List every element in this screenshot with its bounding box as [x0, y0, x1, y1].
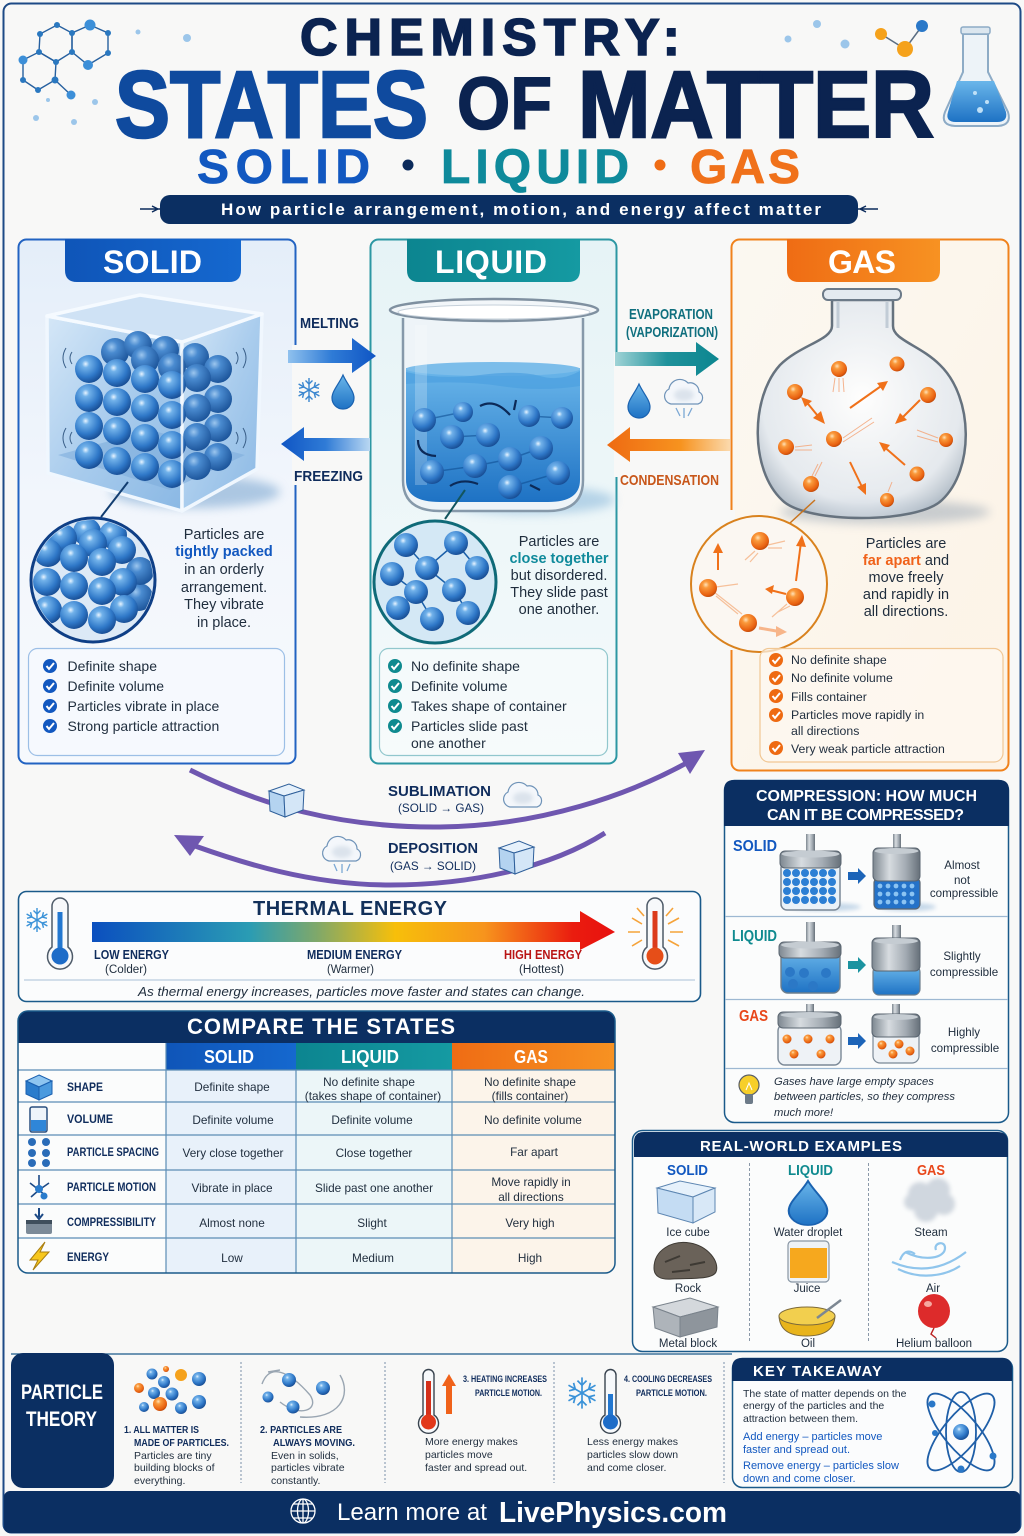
gas column values: No definite shape: [484, 1075, 576, 1089]
icon: round flask with gas particles: [758, 289, 990, 524]
gas compression row: compressible: [931, 1042, 999, 1055]
arrow: sublimation: (SOLID → GAS): [398, 801, 484, 815]
footer: Learn more at: [337, 1499, 487, 1526]
solid compression row: SOLID: [733, 838, 777, 855]
gas column values: Move rapidly in: [491, 1175, 571, 1189]
energy labels: (Hottest): [519, 964, 564, 976]
table title bar: COMPARE THE STATES: [187, 1014, 455, 1039]
point 3: 3. HEATING INCREASES: [463, 1374, 547, 1384]
particle theory label: [11, 1353, 114, 1488]
liquid property list: No definite shape: [411, 658, 520, 674]
point 1: Particles are tiny: [134, 1450, 212, 1462]
liquid compression row: [732, 922, 998, 995]
liquid property list: Takes shape of container: [411, 698, 567, 714]
point 2: Even in solids,: [271, 1450, 339, 1462]
gas column values: High: [518, 1251, 542, 1265]
panel: key takeaway: energy of the particles and the: [743, 1400, 884, 1412]
arrow: evaporation: [615, 306, 719, 376]
solid header: SOLID: [103, 244, 202, 280]
arrow: evaporation: (VAPORIZATION): [626, 324, 718, 341]
arrow: deposition: (GAS → SOLID): [390, 859, 476, 873]
icon: ice cube with particles: [47, 295, 280, 517]
point 3: [418, 1370, 547, 1474]
point 1: [124, 1366, 229, 1487]
liquid description: close together: [509, 551, 609, 567]
liquid examples: Juice: [794, 1283, 820, 1295]
column headers: [166, 1043, 615, 1070]
solid description: in an orderly: [184, 562, 265, 578]
row labels: [67, 1080, 159, 1264]
gas description: far apart and: [863, 553, 949, 569]
row icons: [26, 1075, 52, 1270]
panel: key takeaway: faster and spread out.: [743, 1444, 850, 1456]
footer: LivePhysics.com: [499, 1497, 727, 1529]
gas property list: all directions: [791, 724, 859, 738]
solid column values: Definite volume: [192, 1113, 274, 1127]
gas compression row: GAS: [739, 1008, 768, 1025]
compression header: [724, 780, 1009, 826]
panel: gas: [691, 239, 1008, 770]
arrow: freezing: FREEZING: [294, 468, 363, 485]
point 4: 4. COOLING DECREASES: [624, 1374, 712, 1384]
solid column values: Almost none: [199, 1216, 265, 1230]
panel: key takeaway: down and come closer.: [743, 1473, 856, 1485]
liquid header: LIQUID: [435, 244, 547, 280]
gas column values: Far apart: [510, 1145, 559, 1159]
liquid property list: [380, 648, 608, 756]
liquid property list: one another: [411, 735, 486, 751]
point 4: and come closer.: [587, 1462, 666, 1474]
column headers: SOLID: [204, 1047, 254, 1067]
gas description: Particles are: [866, 536, 946, 552]
row labels: ENERGY: [67, 1250, 109, 1264]
solid examples: Metal block: [659, 1338, 717, 1350]
particle theory label: PARTICLE: [21, 1381, 103, 1404]
panel: compression: [724, 780, 1009, 1122]
compression header: CAN IT BE COMPRESSED?: [767, 807, 964, 824]
point 3: More energy makes: [425, 1436, 518, 1448]
gas compression row: [739, 1004, 999, 1065]
solid property list: [28, 648, 284, 756]
title: of: OF: [457, 62, 552, 145]
gas property list: No definite shape: [791, 653, 887, 667]
liquid column values: (takes shape of container): [305, 1089, 441, 1103]
compression note: Gases have large empty spaces: [774, 1076, 934, 1088]
solid examples: [653, 1163, 718, 1350]
point 2: 2. PARTICLES ARE: [260, 1424, 342, 1436]
liquid column values: Medium: [352, 1251, 394, 1265]
icon: globe: [291, 1499, 315, 1523]
thermal heading: THERMAL ENERGY: [253, 898, 448, 920]
liquid column values: [305, 1075, 441, 1265]
gas zoom circle: [691, 516, 827, 652]
solid description: arrangement.: [181, 580, 267, 596]
gas examples: Air: [926, 1283, 940, 1295]
arrow: evaporation: EVAPORATION: [629, 306, 713, 323]
subtitle: solid liquid gas: [197, 141, 800, 194]
point 1: 1. ALL MATTER IS: [124, 1424, 199, 1436]
gas property list: Very weak particle attraction: [791, 742, 945, 756]
arrow: sublimation: [190, 750, 705, 827]
energy labels: MEDIUM ENERGY: [307, 948, 403, 962]
point 4: [566, 1370, 712, 1474]
energy labels: LOW ENERGY: [94, 948, 170, 962]
panel: solid: [18, 239, 299, 764]
arrow: deposition: [174, 833, 605, 885]
liquid compression row: LIQUID: [732, 928, 777, 945]
gas column values: No definite volume: [484, 1113, 582, 1127]
liquid property list: Particles slide past: [411, 718, 528, 734]
liquid examples: Oil: [801, 1338, 815, 1350]
liquid column values: Close together: [336, 1146, 412, 1160]
column headers: LIQUID: [341, 1047, 399, 1067]
point 3: particles move: [425, 1449, 493, 1461]
solid property list: Strong particle attraction: [68, 718, 219, 734]
icon: atom: [917, 1384, 1005, 1480]
row labels: PARTICLE MOTION: [67, 1180, 156, 1194]
energy labels: (Warmer): [327, 964, 374, 976]
arrow: freezing: [281, 427, 370, 485]
compression note: between particles, so they compress: [774, 1091, 955, 1103]
solid examples: Ice cube: [666, 1227, 710, 1239]
icon: snowflake and droplet (melting): [297, 375, 354, 409]
liquid description: They slide past: [510, 585, 608, 601]
solid property list: Definite shape: [68, 658, 157, 674]
solid header: [65, 239, 241, 282]
solid column values: [182, 1080, 284, 1265]
solid column values: Vibrate in place: [191, 1181, 273, 1195]
point 1: building blocks of: [134, 1462, 215, 1474]
solid column values: Low: [221, 1251, 243, 1265]
solid compression row: compressible: [930, 887, 998, 900]
point 4: PARTICLE MOTION.: [636, 1388, 707, 1398]
column tints: [166, 1070, 615, 1273]
panel: key takeaway: [732, 1358, 1012, 1488]
liquid column values: Slight: [357, 1216, 387, 1230]
panel: real-world examples: [632, 1130, 1008, 1352]
arrow: melting: MELTING: [300, 315, 359, 332]
liquid property list: Definite volume: [411, 678, 508, 694]
point 3: faster and spread out.: [425, 1462, 527, 1474]
solid property list: Definite volume: [68, 678, 164, 694]
solid description: Particles are: [184, 527, 264, 543]
particle theory label: THEORY: [26, 1408, 97, 1431]
liquid description: Particles are: [519, 534, 599, 550]
examples header: REAL-WORLD EXAMPLES: [700, 1138, 902, 1155]
liquid header: [407, 239, 580, 282]
arrow: deposition: DEPOSITION: [388, 840, 478, 857]
icon: droplet and cloud (evaporation): [628, 379, 703, 418]
gas description: and rapidly in: [863, 587, 949, 603]
liquid column values: Slide past one another: [315, 1181, 433, 1195]
liquid column values: Definite volume: [331, 1113, 413, 1127]
thermal caption: As thermal energy increases, particles move faster and states can change.: [137, 984, 585, 999]
gas examples: Helium balloon: [896, 1338, 972, 1350]
row labels: VOLUME: [67, 1112, 113, 1126]
solid examples: Rock: [675, 1283, 701, 1295]
gas column values: (fills container): [492, 1089, 568, 1103]
point 4: Less energy makes: [587, 1436, 678, 1448]
table: compare the states: [18, 1011, 615, 1273]
panel: key takeaway: attraction between them.: [743, 1413, 858, 1425]
energy labels: HIGH ENERGY: [504, 948, 583, 962]
title: matter: MATTER: [578, 52, 934, 158]
subtitle: solid liquid gas: SOLID: [197, 141, 370, 194]
subtitle: solid liquid gas: LIQUID: [441, 141, 629, 194]
energy labels: [94, 948, 583, 976]
arrow: condensation: [607, 427, 730, 489]
gas description: all directions.: [864, 604, 948, 620]
gas examples: [892, 1163, 972, 1350]
liquid compression row: Slightly: [943, 950, 981, 963]
solid zoom circle: [31, 518, 155, 642]
arrow: melting: [288, 315, 376, 373]
liquid examples: LIQUID: [788, 1163, 833, 1179]
solid column values: Very close together: [182, 1146, 284, 1160]
gas property list: [760, 648, 1003, 762]
subtitle pill: [140, 195, 878, 224]
solid description: in place.: [197, 615, 251, 631]
column headers: GAS: [514, 1047, 548, 1067]
panel: key takeaway: The state of matter depends on the: [743, 1388, 907, 1400]
gas property list: Fills container: [791, 690, 867, 704]
solid compression row: [733, 834, 998, 911]
title: states: STATES: [115, 52, 428, 158]
row labels: COMPRESSIBILITY: [67, 1215, 156, 1229]
liquid description: one another.: [519, 602, 599, 618]
point 2: [260, 1370, 355, 1487]
compression note: much more!: [774, 1107, 833, 1119]
point 3: PARTICLE MOTION.: [475, 1388, 542, 1398]
title: chemistry: CHEMISTRY:: [300, 9, 680, 67]
compression header: COMPRESSION: HOW MUCH: [756, 788, 977, 805]
point 4: particles slow down: [587, 1449, 678, 1461]
panel: key takeaway: KEY TAKEAWAY: [753, 1363, 882, 1380]
gas property list: No definite volume: [791, 671, 893, 685]
solid description: They vibrate: [184, 597, 264, 613]
row labels: SHAPE: [67, 1080, 103, 1094]
examples header: [634, 1132, 1008, 1157]
panel: thermal energy: [18, 892, 700, 1002]
liquid zoom circle: [374, 521, 496, 643]
arrow: sublimation: SUBLIMATION: [388, 783, 491, 800]
solid property list: Particles vibrate in place: [68, 698, 219, 714]
liquid examples: [774, 1163, 843, 1350]
liquid compression row: compressible: [930, 966, 998, 979]
gas header: GAS: [828, 244, 896, 280]
icon: hot thermometer: [628, 898, 683, 969]
icons: small molecule and dots: [784, 20, 928, 57]
point 1: MADE OF PARTICLES.: [134, 1437, 229, 1449]
solid column values: Definite shape: [194, 1080, 270, 1094]
arrow: condensation: CONDENSATION: [620, 472, 719, 489]
liquid description: but disordered.: [511, 568, 607, 584]
point 2: ALWAYS MOVING.: [273, 1437, 355, 1449]
gas examples: Steam: [914, 1227, 948, 1239]
subtitle: solid liquid gas: GAS: [690, 141, 800, 194]
subtitle pill: How particle arrangement, motion, and energy affect matter: [221, 200, 821, 219]
solid compression row: not: [954, 874, 971, 887]
table title bar: [18, 1011, 615, 1043]
gas property list: Particles move rapidly in: [791, 708, 924, 722]
solid description: tightly packed: [175, 544, 273, 560]
footer: [4, 1491, 1020, 1533]
icon: hexagon molecule: [18, 20, 191, 125]
thermal gradient arrow: [92, 911, 615, 950]
gas examples: GAS: [917, 1163, 945, 1179]
gas column values: all directions: [498, 1190, 564, 1204]
gas description: move freely: [869, 570, 944, 586]
point 1: everything.: [134, 1475, 185, 1487]
gas header: [787, 239, 940, 282]
icon: cold thermometer: [25, 898, 72, 969]
solid compression row: Almost: [944, 859, 980, 872]
point 2: constantly.: [271, 1475, 320, 1487]
icon: beaker with water: [390, 299, 615, 519]
icon: erlenmeyer flask: [944, 27, 1009, 126]
row labels: PARTICLE SPACING: [67, 1145, 159, 1159]
energy labels: (Colder): [105, 964, 147, 976]
panel: liquid: [370, 239, 621, 764]
solid examples: SOLID: [667, 1163, 708, 1179]
gas compression row: Highly: [948, 1026, 980, 1039]
panel: key takeaway: Remove energy – particles slow: [743, 1460, 899, 1472]
panel: key takeaway: Add energy – particles move: [743, 1431, 882, 1443]
strip: particle theory: [11, 1353, 1012, 1488]
gas column values: Very high: [505, 1216, 555, 1230]
point 2: particles vibrate: [271, 1462, 345, 1474]
icon: light bulb: [739, 1075, 759, 1104]
gas column values: [484, 1075, 582, 1265]
liquid column values: No definite shape: [323, 1075, 415, 1089]
liquid examples: Water droplet: [774, 1227, 843, 1239]
